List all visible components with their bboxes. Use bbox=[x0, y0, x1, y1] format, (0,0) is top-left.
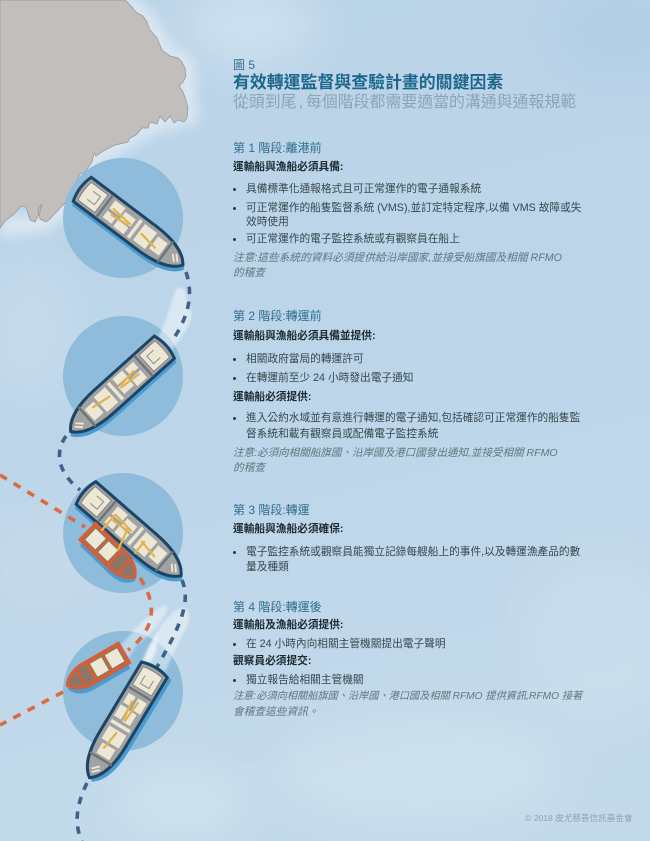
figure label: 圖 5 bbox=[233, 58, 255, 72]
bullet: 可正常運作的電子監控系統或有觀察員在船上 bbox=[246, 233, 460, 245]
land bbox=[0, 0, 188, 228]
coastal shallows bbox=[0, 0, 188, 228]
note continuation: 會稽查這些資訊。 bbox=[233, 706, 319, 718]
note continuation: 的稽查 bbox=[233, 462, 265, 474]
bullet: 相關政府當局的轉運許可 bbox=[246, 353, 364, 365]
icon: carrier ship stage 2 bbox=[61, 334, 176, 443]
panel: stage 1 circle bbox=[63, 158, 183, 278]
note: 注意:必須向相關船旗國、沿岸國及港口國發出通知,並接受相關 RFMO bbox=[233, 447, 558, 459]
carrier requirement label: 運輸船必須提供: bbox=[233, 391, 311, 403]
bullet: 可正常運作的船隻監督系統 (VMS),並訂定特定程序,以備 VMS 故障或失 bbox=[246, 202, 581, 214]
bullet: 具備標準化通報格式且可正常運作的電子通報系統 bbox=[246, 183, 481, 195]
panel: stage 3 bbox=[233, 503, 580, 573]
note: 注意:這些系統的資料必須提供給沿岸國家,並接受船旗國及相關 RFMO bbox=[233, 252, 562, 264]
panel: stage 4 circle bbox=[63, 631, 183, 751]
ship shadows bbox=[62, 180, 192, 788]
icon: transfer cranes stage 3 bbox=[102, 515, 144, 553]
icon: fishing boat stage 4 bbox=[61, 642, 131, 696]
stage 4 heading: 第 4 階段:轉運後 bbox=[233, 600, 322, 614]
bullet: 進入公約水域並有意進行轉運的電子通知,包括確認可正常運作的船隻監 bbox=[246, 412, 580, 424]
note: 注意:必須向相關船旗國、沿岸國、港口國及相關 RFMO 提供資訊,RFMO 接著 bbox=[233, 691, 582, 702]
route: fishing vessel dashed path bbox=[0, 475, 151, 725]
title: 有效轉運監督與查驗計畫的關鍵因素 bbox=[233, 73, 503, 92]
stage 2 requirement label: 運輸船與漁船必須具備並提供: bbox=[233, 330, 376, 342]
observer requirement label: 觀察員必須提交: bbox=[233, 655, 311, 667]
icon: fishing boat stage 3 bbox=[79, 522, 144, 586]
route: carrier vessel dashed path bbox=[59, 272, 189, 841]
bullet: 在 24 小時內向相關主管機關提出電子聲明 bbox=[246, 638, 446, 650]
stage 4 requirement label: 運輸船及漁船必須提供: bbox=[233, 619, 343, 631]
bullet: 在轉運前至少 24 小時發出電子通知 bbox=[246, 372, 413, 384]
copyright: © 2018 皮尤慈善信託基金會 bbox=[525, 813, 633, 823]
panel: stage 2 circle bbox=[63, 316, 183, 436]
ship wakes bbox=[121, 287, 192, 672]
stage 1 requirement label: 運輸船與漁船必須具備: bbox=[233, 161, 343, 173]
bullet continuation: 督系統和載有觀察員或配備電子監控系統 bbox=[246, 428, 438, 440]
stage 1 heading: 第 1 階段:離港前 bbox=[233, 141, 322, 155]
icon: carrier ship stage 3 bbox=[74, 480, 191, 587]
subtitle: 從頭到尾,每個階段都需要適當的溝通與通報規範 bbox=[233, 94, 576, 111]
bullet continuation: 效時使用 bbox=[246, 216, 289, 228]
bullet continuation: 量及種類 bbox=[246, 561, 289, 573]
panel: stage 3 circle bbox=[63, 473, 183, 593]
panel: stage 4 bbox=[233, 600, 584, 718]
panel: stage 2 bbox=[233, 309, 580, 474]
stage 2 heading: 第 2 階段:轉運前 bbox=[233, 309, 322, 323]
stage 3 heading: 第 3 階段:轉運 bbox=[233, 503, 310, 517]
bullet: 獨立報告給相關主管機關 bbox=[246, 674, 364, 686]
note continuation: 的稽查 bbox=[233, 267, 265, 279]
icon: carrier ship stage 4 bbox=[77, 660, 169, 785]
icon: carrier ship stage 1 bbox=[71, 176, 192, 277]
bullet: 電子監控系統或觀察員能獨立記錄每艘船上的事件,以及轉運漁產品的數 bbox=[246, 546, 580, 558]
stage 3 requirement label: 運輸船與漁船必須確保: bbox=[233, 523, 343, 535]
panel: stage 1 bbox=[233, 141, 581, 279]
